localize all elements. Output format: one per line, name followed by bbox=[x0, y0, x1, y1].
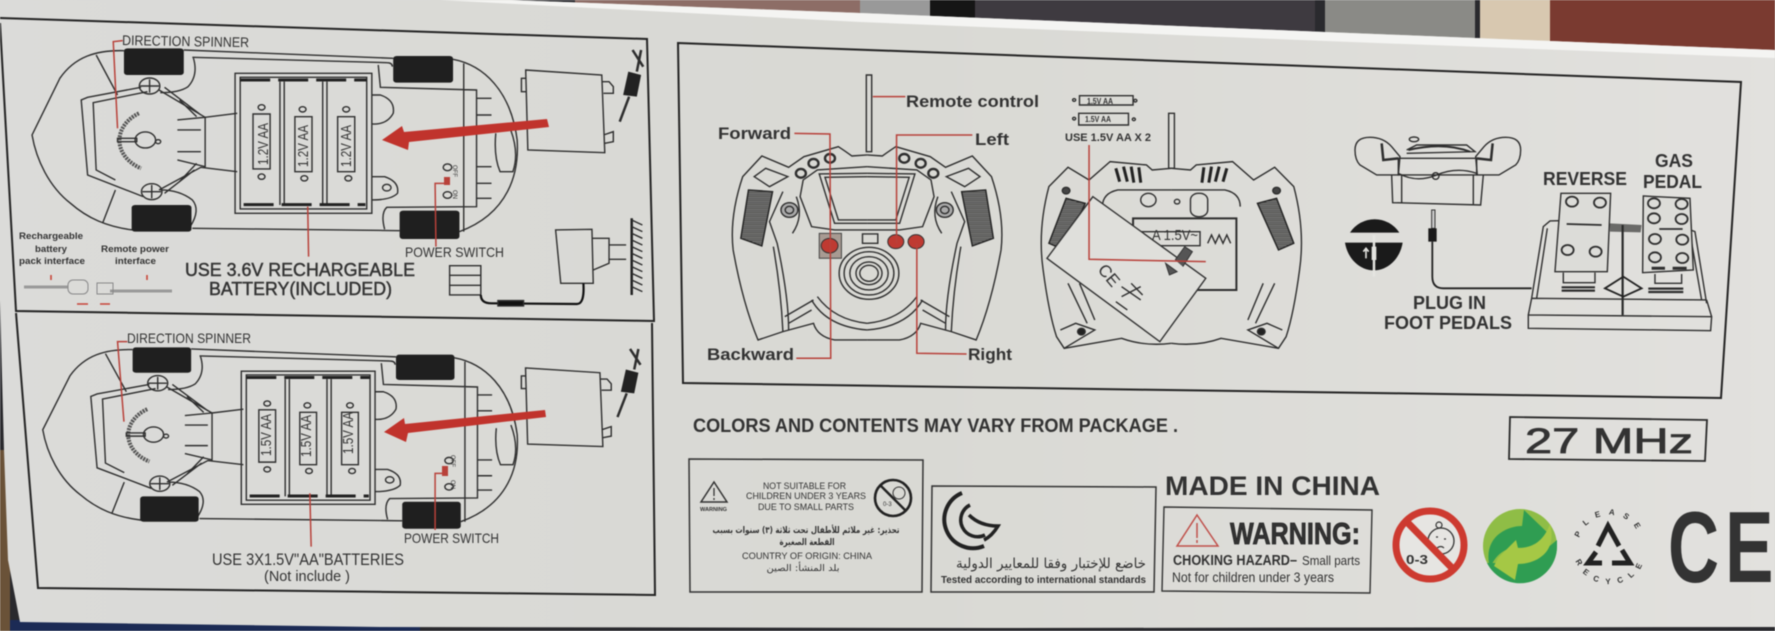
battery labels 1.5V AA bbox=[258, 412, 357, 457]
pedal labels: GAS bbox=[1655, 151, 1693, 171]
control labels bbox=[707, 92, 1039, 364]
connector interface diagram: Rechargeable bbox=[19, 231, 83, 241]
warning text bbox=[712, 481, 900, 574]
control labels: Right bbox=[968, 345, 1012, 364]
label: direction spinner bbox=[113, 32, 249, 128]
gas pedal bbox=[1643, 196, 1693, 292]
battery hint: 2 x AA bbox=[1065, 96, 1151, 144]
steering unit top view bbox=[1355, 137, 1521, 205]
remote control back view with open cover bbox=[1041, 113, 1301, 348]
mark: CE: C bbox=[1668, 492, 1719, 604]
power switch: OFF bbox=[449, 455, 455, 467]
panel: choking hazard warning: WARNING: bbox=[1230, 516, 1360, 551]
icon: green dot bbox=[1483, 509, 1557, 583]
pedal connection diagram bbox=[1345, 137, 1712, 331]
battery labels 1.5V AA: 1.5V AA bbox=[298, 415, 315, 457]
icon: please recycle: RECYCLE bbox=[1575, 558, 1643, 585]
label: direction spinner: DIRECTION SPINNER bbox=[127, 330, 251, 346]
panel: tested according to standards: خاضع للإختبار وفقا للمعايير الدولية bbox=[956, 556, 1146, 572]
icon: test mark logo bbox=[944, 493, 998, 548]
foot pedal base bbox=[1528, 221, 1712, 331]
top edge highlight bbox=[440, 0, 1775, 58]
icon: warning triangle bbox=[700, 482, 727, 513]
control labels: Remote control bbox=[906, 92, 1039, 111]
reverse pedal bbox=[1555, 193, 1611, 291]
remote control front view bbox=[732, 75, 1002, 358]
callout: use rechargeable battery: USE 3.6V RECHARGEABLE bbox=[185, 260, 415, 280]
warning text: بلد المنشأ: الصين bbox=[766, 561, 840, 574]
panel: AA battery installation bbox=[16, 313, 655, 595]
heading: made in china: MADE IN CHINA bbox=[1165, 471, 1380, 501]
mark: CE: E bbox=[1725, 490, 1774, 604]
label: direction spinner: DIRECTION SPINNER bbox=[122, 32, 249, 50]
power switch: POWER SWITCH bbox=[405, 244, 504, 260]
panel: small parts warning box bbox=[689, 459, 923, 592]
icon: please recycle: PLEASE bbox=[1574, 508, 1642, 538]
icon: warning triangle: WARNING bbox=[700, 507, 727, 513]
battery hint: 2 x AA: 1.5V AA bbox=[1087, 97, 1113, 106]
battery hint: 2 x AA: 1.5V AA bbox=[1085, 115, 1111, 124]
icon: red warning triangle bbox=[1177, 515, 1218, 546]
icon: not for 0-3 bbox=[875, 480, 911, 516]
panel: rechargeable battery installation bbox=[0, 18, 654, 321]
warning text: NOT SUITABLE FOR bbox=[763, 481, 846, 492]
control labels: Left bbox=[975, 130, 1009, 149]
mark: CE bbox=[1668, 490, 1774, 604]
power switch: ON bbox=[451, 190, 457, 199]
connector interface diagram: Remote power bbox=[101, 244, 170, 254]
warning text: القطعة الصغيرة bbox=[780, 538, 834, 548]
arrow: insert battery bbox=[382, 119, 549, 150]
power switch: ON bbox=[449, 480, 455, 489]
charger with wall plug bbox=[450, 218, 642, 306]
callout: use AA batteries: (Not include ) bbox=[264, 568, 350, 585]
panel: choking hazard warning bbox=[1162, 507, 1372, 593]
panel: choking hazard warning: CHOKING HAZARD– bbox=[1173, 553, 1297, 569]
connector interface diagram: interface bbox=[115, 256, 156, 266]
badge: 27 MHz: 27 MHz bbox=[1525, 422, 1693, 461]
callout: use AA batteries bbox=[212, 493, 404, 585]
power switch: POWER SWITCH bbox=[404, 530, 499, 546]
pedal labels: PEDAL bbox=[1643, 172, 1702, 192]
jack plug and cable bbox=[1428, 210, 1532, 288]
connector interface diagram bbox=[19, 231, 172, 304]
battery hint: 2 x AA: USE 1.5V AA X 2 bbox=[1065, 132, 1151, 144]
warning text: DUE TO SMALL PARTS bbox=[758, 502, 854, 513]
warning text: CHILDREN UNDER 3 YEARS bbox=[746, 491, 866, 502]
battery labels 1.2V AA: 1.2V AA bbox=[295, 125, 312, 167]
power switch bbox=[404, 455, 499, 546]
remote control back view with open cover: A 1.5V~ bbox=[1152, 227, 1198, 244]
power switch bbox=[405, 165, 504, 260]
pedal labels bbox=[1384, 151, 1702, 333]
remote control back view with open cover: CE bbox=[1094, 260, 1124, 291]
panel: tested according to standards bbox=[931, 486, 1156, 592]
battery labels 1.2V AA: 1.2V AA bbox=[255, 123, 272, 165]
icon: black plug socket circle bbox=[1345, 219, 1403, 277]
icon: not for 0-3: 0-3 bbox=[883, 502, 892, 508]
power switch: OFF bbox=[451, 165, 457, 177]
badge: 27 MHz bbox=[1509, 417, 1707, 461]
notice: colors and contents: COLORS AND CONTENTS MAY VARY FROM PACKAGE . bbox=[693, 415, 1178, 437]
label: direction spinner bbox=[118, 330, 251, 422]
warning text: COUNTRY OF ORIGIN: CHINA bbox=[742, 551, 873, 562]
panel: remote control and pedals bbox=[678, 43, 1741, 398]
icon: red prohibited baby 0-3: 0-3 bbox=[1406, 552, 1428, 567]
battery labels 1.5V AA: 1.5V AA bbox=[258, 414, 275, 456]
battery labels 1.2V AA bbox=[255, 123, 355, 167]
car chassis diagram with AA batteries bbox=[43, 347, 640, 529]
panel: choking hazard warning: Small parts bbox=[1302, 553, 1360, 568]
arrow: insert batteries bbox=[384, 410, 546, 442]
connector interface diagram: pack interface bbox=[19, 256, 85, 266]
battery labels 1.2V AA: 1.2V AA bbox=[338, 125, 355, 167]
pedal labels: FOOT PEDALS bbox=[1384, 313, 1512, 333]
center pedal hinge bbox=[1605, 223, 1642, 315]
pedal labels: PLUG IN bbox=[1413, 293, 1486, 313]
control labels: Backward bbox=[707, 345, 794, 364]
panel: tested according to standards: Tested according to international standards bbox=[941, 574, 1146, 586]
car chassis diagram with rechargeable pack bbox=[32, 48, 643, 239]
callout: use rechargeable battery bbox=[185, 207, 415, 299]
pedal labels: REVERSE bbox=[1543, 169, 1627, 189]
panel: choking hazard warning: Not for children under 3 years bbox=[1172, 570, 1334, 585]
icon: please recycle bbox=[1574, 508, 1643, 585]
connector interface diagram: battery bbox=[35, 244, 67, 254]
icon: red prohibited baby 0-3 bbox=[1396, 511, 1464, 579]
callout: use AA batteries: USE 3X1.5V"AA"BATTERIES bbox=[212, 551, 404, 569]
warning text: تحذير: غير ملائم للأطفال تحت ثلاثة (٣) سنوات بسبب bbox=[712, 524, 900, 536]
control labels: Forward bbox=[718, 124, 791, 143]
battery labels 1.5V AA: 1.5V AA bbox=[340, 412, 357, 454]
callout: use rechargeable battery: BATTERY(INCLUDED) bbox=[209, 279, 392, 299]
